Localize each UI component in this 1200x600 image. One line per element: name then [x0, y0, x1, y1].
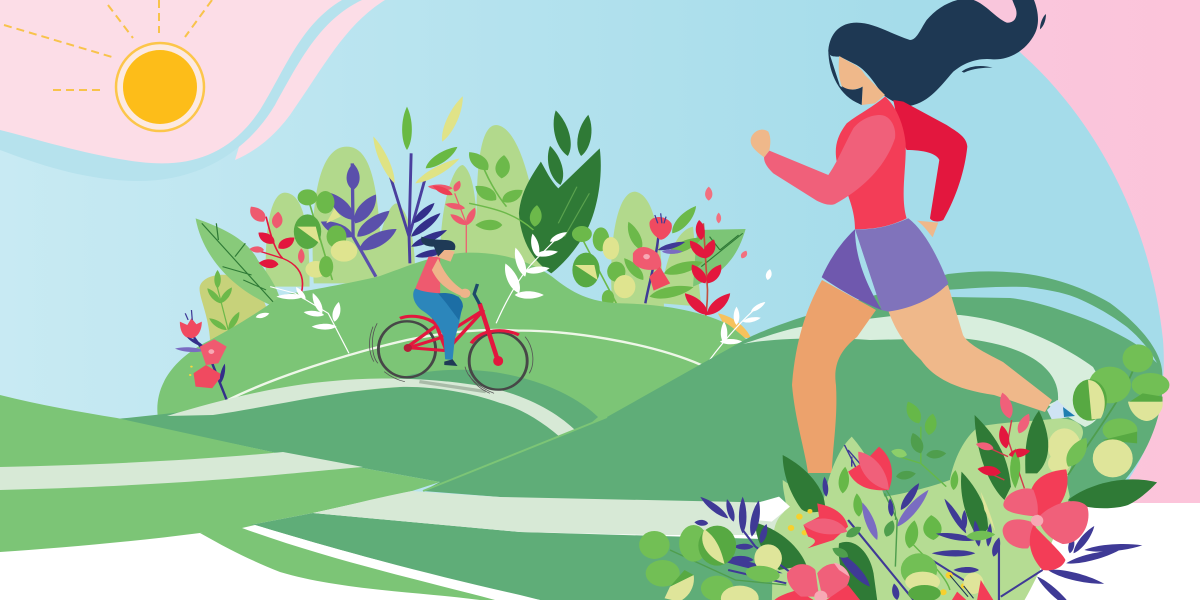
small orange leaf [718, 313, 751, 338]
dark leaves [755, 411, 1157, 600]
front leg [888, 285, 1052, 412]
foreground left bright green band [0, 395, 440, 552]
icon: sun with rays [4, 0, 212, 131]
cyclist [369, 237, 533, 393]
pale and green lower center [901, 492, 996, 600]
leaf, right [693, 229, 746, 287]
hand at hip [917, 221, 938, 237]
right large hill with swirl [423, 271, 1163, 520]
green mid sprigs [838, 399, 1020, 590]
motion lines [369, 323, 533, 393]
pink sprigs [427, 180, 478, 253]
tall red sprig [680, 187, 773, 357]
bouquet [639, 344, 1169, 600]
thin light line along hill [423, 417, 607, 491]
back hill [157, 253, 751, 443]
red sprig, bouquet top [975, 391, 1033, 488]
near arm sleeve [764, 115, 895, 205]
white path line on hill [225, 330, 701, 402]
left red flowers [175, 310, 227, 400]
white leaf cluster [755, 497, 790, 522]
bicycle [378, 284, 527, 390]
lower dark band [250, 513, 800, 600]
purple fern sprays [694, 477, 1143, 600]
shorts [855, 218, 948, 312]
green eucalyptus, upper middle [464, 148, 543, 230]
red tulip [844, 445, 896, 520]
tall purple stem with leaves [369, 95, 468, 263]
far arm sleeve [893, 100, 967, 222]
face and neck [839, 56, 885, 105]
pale fruit circles behind [1048, 428, 1081, 473]
medium hill [117, 387, 607, 491]
back leg [792, 280, 876, 473]
shoe [1047, 400, 1075, 420]
rider [413, 237, 470, 366]
pale stripe lower [313, 491, 790, 535]
hair lock over neck [842, 86, 863, 105]
fist [751, 130, 770, 157]
background bushes [200, 125, 701, 353]
runner [751, 0, 1075, 473]
torso [836, 97, 907, 229]
pale path band [167, 378, 577, 437]
purple fern [317, 163, 401, 277]
eucalyptus, right [1061, 344, 1169, 477]
large veined leaf, left [196, 218, 281, 307]
pale backing foliage [772, 418, 1083, 600]
green eucalyptus, left [294, 189, 357, 280]
dark hill patch behind path [399, 370, 598, 435]
dark large leaves [519, 109, 601, 273]
pale stripe left [0, 452, 363, 490]
white curved stripe [242, 525, 540, 600]
yellow stamens [788, 509, 967, 595]
eucalyptus, lower left [639, 519, 897, 600]
big pink flower [1003, 469, 1088, 570]
red sprig, left [246, 204, 305, 293]
hillside plants and back hill [157, 95, 773, 443]
curved green tail [200, 524, 520, 600]
eucalyptus and flowers, right of hill [572, 203, 705, 307]
white sprigs [255, 230, 767, 360]
pale path on hill [743, 315, 1103, 427]
hair [828, 0, 1046, 106]
left plant on hill [205, 270, 256, 385]
left red flower [803, 503, 864, 548]
top-left pink wave [0, 0, 385, 181]
shadow [419, 382, 486, 392]
lower right red tulip [950, 575, 995, 600]
bottom red flower [772, 563, 863, 600]
